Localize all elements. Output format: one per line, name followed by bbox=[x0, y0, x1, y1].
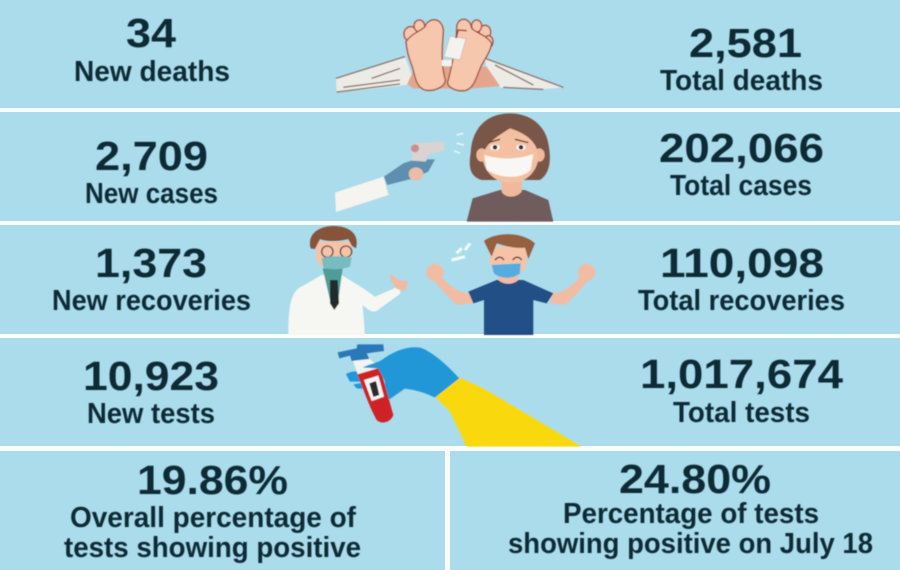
label: total deaths: Total deaths bbox=[660, 65, 823, 97]
icon: doctor and recovered patient bbox=[288, 226, 595, 335]
label: July 18 percentage line 1: Percentage of tests bbox=[563, 498, 819, 530]
number: total tests: 1,017,674 bbox=[640, 351, 843, 397]
icon: feet with toe tag bbox=[336, 19, 563, 92]
panel: recoveries bbox=[0, 225, 900, 335]
label: new tests: New tests bbox=[87, 398, 215, 430]
number: total deaths: 2,581 bbox=[689, 20, 802, 66]
number: total cases: 202,066 bbox=[659, 125, 824, 171]
number: new recoveries: 1,373 bbox=[95, 240, 207, 286]
number: total recoveries: 110,098 bbox=[660, 240, 824, 286]
label: overall percentage line 2: tests showing positive bbox=[64, 532, 361, 564]
number: overall percentage: 19.86% bbox=[137, 457, 288, 503]
number: new tests: 10,923 bbox=[83, 353, 219, 399]
label: overall percentage line 1: Overall percentage of bbox=[70, 502, 356, 534]
label: total tests: Total tests bbox=[673, 397, 810, 429]
number: July 18 percentage: 24.80% bbox=[619, 456, 771, 502]
label: new recoveries: New recoveries bbox=[52, 285, 251, 317]
label: total cases: Total cases bbox=[670, 170, 812, 202]
label: July 18 percentage line 2: showing positive on July 18 bbox=[508, 528, 873, 560]
number: new deaths: 34 bbox=[126, 10, 176, 56]
panel: cases bbox=[0, 112, 900, 222]
label: total recoveries: Total recoveries bbox=[638, 285, 845, 317]
panel: July 18 positive percentage bbox=[450, 451, 900, 570]
icon: temperature check on masked woman bbox=[335, 113, 553, 222]
label: new deaths: New deaths bbox=[74, 56, 230, 88]
panel: tests bbox=[0, 338, 900, 447]
number: new cases: 2,709 bbox=[95, 133, 208, 179]
panel: deaths bbox=[0, 0, 900, 108]
label: new cases: New cases bbox=[85, 178, 218, 210]
icon: gloved hand holding test tube bbox=[338, 344, 582, 447]
panel: overall positive percentage bbox=[0, 451, 445, 570]
